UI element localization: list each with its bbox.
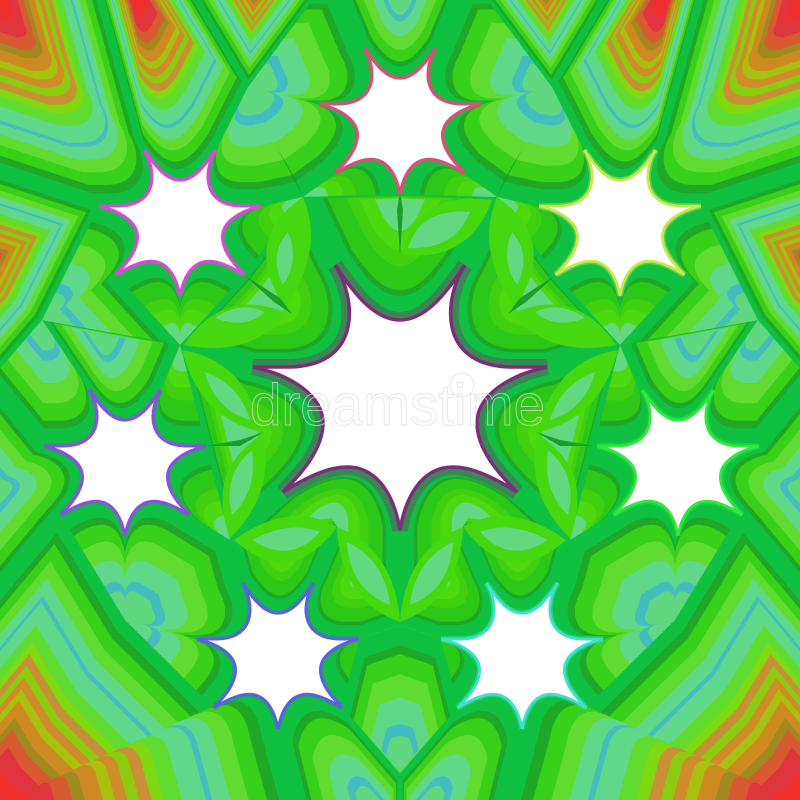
watermark: dreamstime <box>250 373 545 438</box>
upper right star <box>539 150 701 296</box>
stars <box>44 48 759 729</box>
left star <box>44 390 206 536</box>
lower right star <box>441 583 603 729</box>
centre star <box>253 265 547 530</box>
lower left star <box>197 583 359 729</box>
star shadows <box>44 48 759 729</box>
top star <box>319 48 481 194</box>
upper left star <box>99 150 261 296</box>
petals right half <box>303 0 800 800</box>
petals left half <box>0 0 497 800</box>
right star <box>597 390 759 536</box>
